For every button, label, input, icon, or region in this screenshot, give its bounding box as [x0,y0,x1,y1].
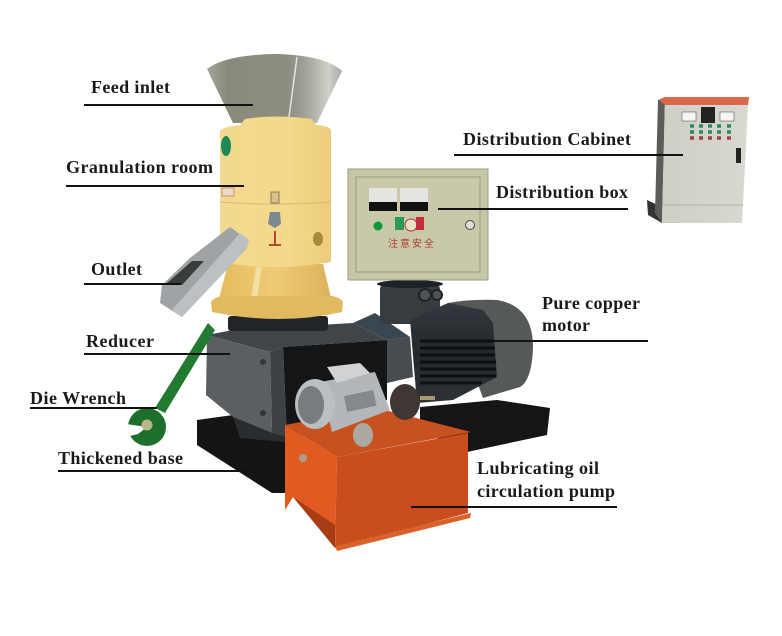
side port [300,232,323,247]
die wrench [126,323,215,446]
label: Outlet: Outlet [91,259,142,279]
lubrication pump motor [295,363,435,447]
pellet mill machine [126,54,533,551]
orange oil tank [285,408,471,551]
label: Lubricating oil circulation pump: Lubricating oil [477,458,599,478]
label: Lubricating oil circulation pump: circulation pump [477,481,615,501]
yellow flange [211,296,343,319]
base frames [197,400,550,493]
label: Distribution box: Distribution box [496,182,628,202]
label: Pure copper motor: Pure copper [542,293,640,313]
discharge column [228,316,328,331]
outlet chute [160,227,249,317]
reducer gearbox [206,313,413,442]
granulation chamber [220,116,331,267]
yellow lower cone [218,264,332,302]
distribution box: 注意安全 [388,237,436,250]
electric motor [377,280,533,403]
label: Outlet [84,259,181,285]
green badge [221,136,231,156]
hopper [207,54,342,123]
label: Granulation room: Granulation room [66,157,213,177]
label: Pure copper motor [494,293,648,342]
warning sticker [222,188,234,196]
label: Thickened base: Thickened base [58,448,183,468]
door latch [268,192,281,245]
label: Lubricating oil circulation pump [411,458,617,508]
label: Distribution Cabinet: Distribution Cabinet [463,129,631,149]
label: Pure copper motor: motor [542,315,590,335]
label: Die Wrench: Die Wrench [30,388,126,408]
distribution cabinet [647,97,749,223]
distribution box [348,169,488,280]
label: Feed inlet: Feed inlet [91,77,170,97]
label: Reducer: Reducer [86,331,154,351]
